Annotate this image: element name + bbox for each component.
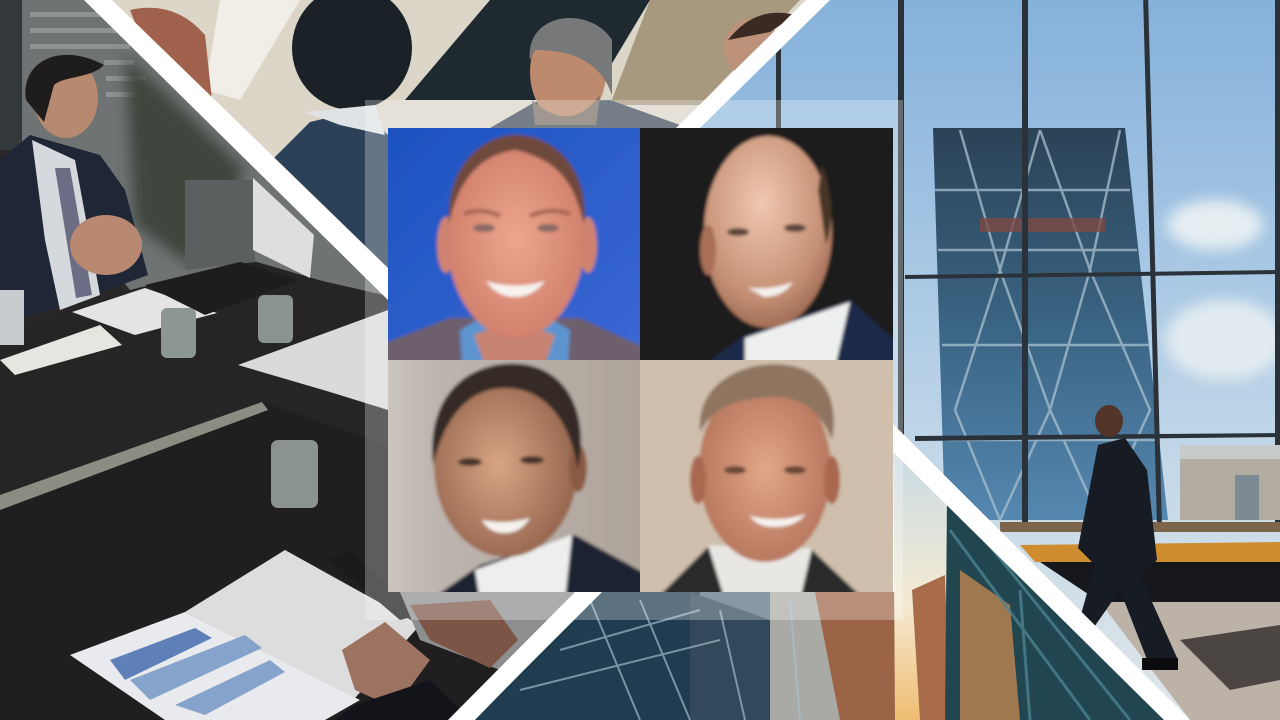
portrait: older man on beige background [640, 360, 893, 592]
binder under the hands [400, 592, 575, 670]
panel: glass buildings bottom centre [475, 592, 895, 720]
panel: sunset building bottom right [893, 430, 1165, 720]
translucent centre overlay [365, 100, 903, 620]
portrait: dark-haired man in suit [388, 360, 640, 592]
panel: boardroom table photo [0, 0, 610, 720]
open report [70, 550, 420, 720]
panel: tower window photo right [680, 0, 1280, 720]
hands over the report [335, 600, 518, 720]
bench and floor [1000, 522, 1280, 720]
documents and glasses [0, 262, 388, 508]
man with grey hair [490, 18, 680, 128]
skyscraper [933, 128, 1168, 520]
portrait: man on blue background [388, 128, 640, 360]
man walking [1078, 405, 1178, 670]
window frames [776, 0, 1280, 530]
portrait: bald man on black background [640, 128, 893, 360]
city view [1180, 445, 1280, 520]
panel: meeting photo top centre [100, 0, 830, 275]
man in suit [0, 55, 148, 318]
table edge strip [0, 402, 268, 510]
